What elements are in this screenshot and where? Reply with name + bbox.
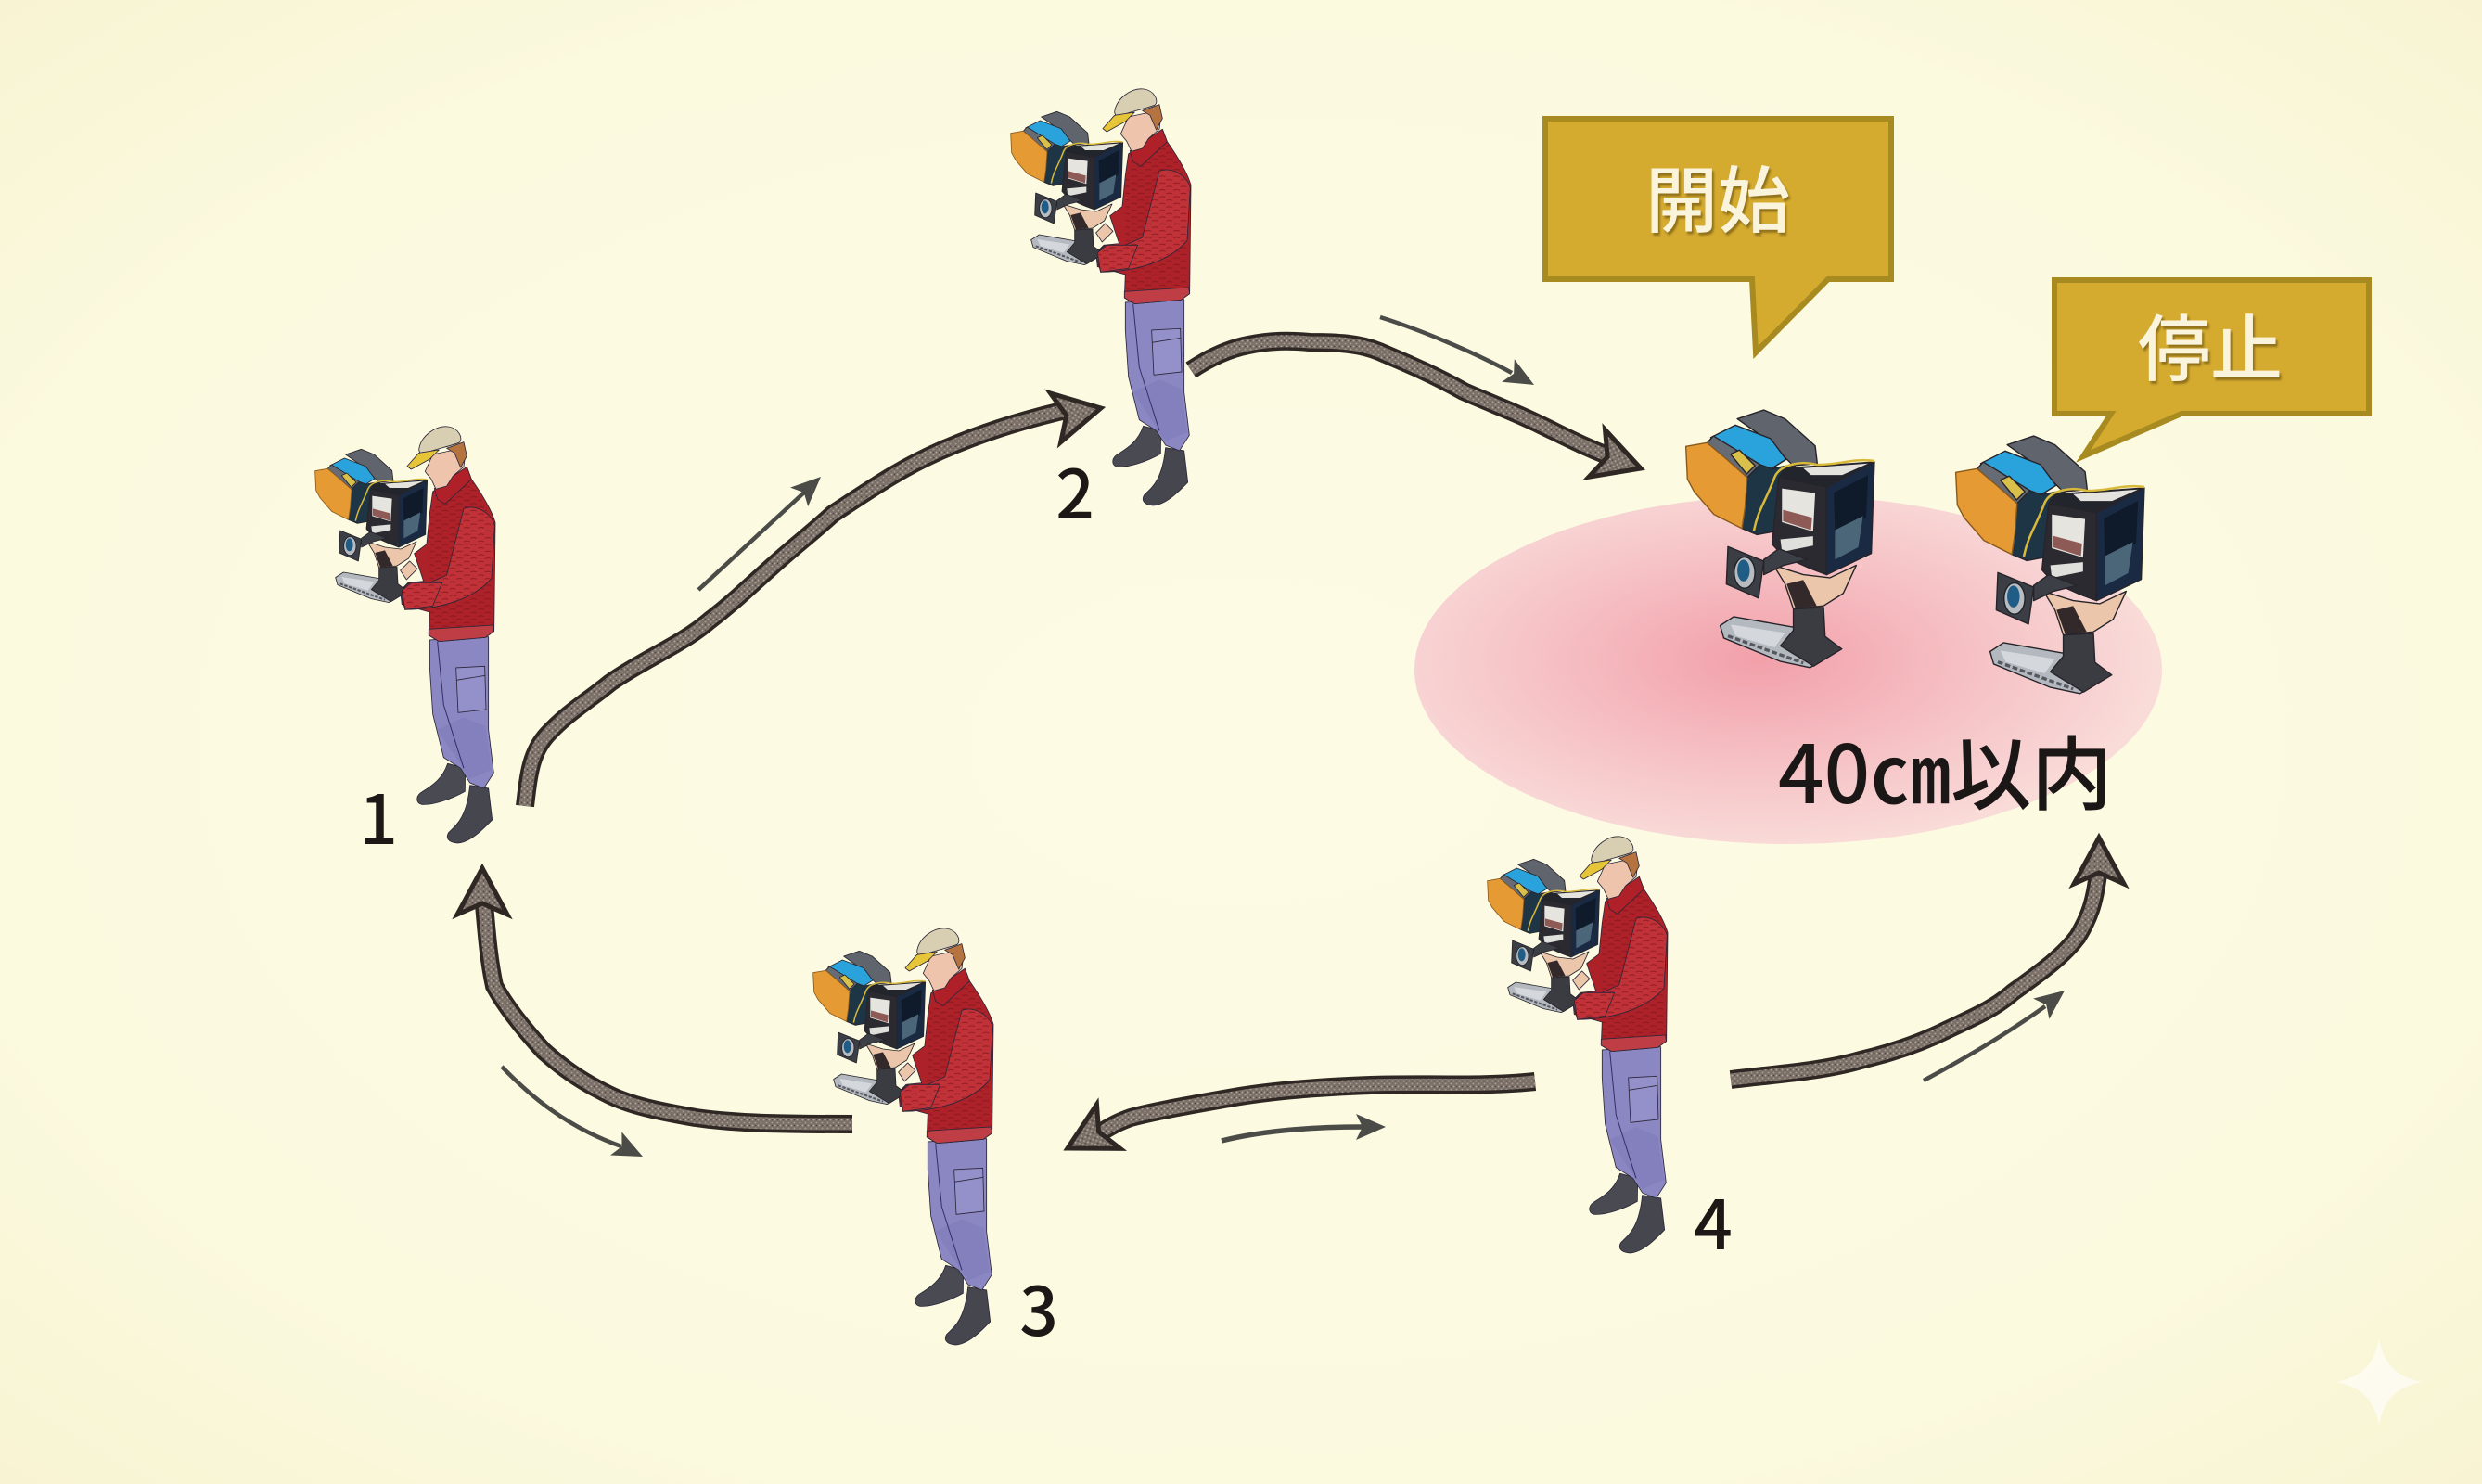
callout: stop: [2054, 280, 2369, 456]
arrow: 2 to start: [1191, 341, 1649, 493]
small arrow: direction 4 to 3: [1222, 1114, 1386, 1141]
number 3: 3: [1019, 1258, 1058, 1356]
arrow: 3 to 1: [457, 868, 852, 1124]
arrow: 4 to stop: [1731, 838, 2124, 1080]
small arrow: direction 3 to 1: [502, 1067, 648, 1169]
arrow: 1 to 2: [525, 384, 1107, 806]
person 2 with device: [1011, 89, 1191, 505]
number 1: 1: [359, 766, 398, 864]
arrow: 4 to 3: [1055, 1081, 1535, 1171]
number 4: 4: [1694, 1171, 1733, 1270]
small arrow: direction 2 to start: [1380, 317, 1541, 396]
distance label: 40㎝以内: [1778, 710, 2112, 827]
callout: start: [1545, 119, 1891, 352]
watermark sparkle: [2336, 1339, 2422, 1425]
small arrow: direction 1 to 2: [698, 467, 830, 590]
person 1 with device: [315, 427, 495, 843]
small arrow: direction 4 to stop: [1924, 980, 2073, 1081]
callout: start: 開始: [1645, 144, 1790, 248]
device at start position: [1686, 410, 1874, 668]
number 2: 2: [1055, 441, 1094, 539]
pink zone: 40 cm radius: [1414, 495, 2162, 844]
callout: stop: 停止: [2138, 292, 2283, 396]
person 4 with device: [1488, 837, 1668, 1253]
person 3 with device: [813, 928, 993, 1345]
device at stop position: [1956, 436, 2144, 694]
